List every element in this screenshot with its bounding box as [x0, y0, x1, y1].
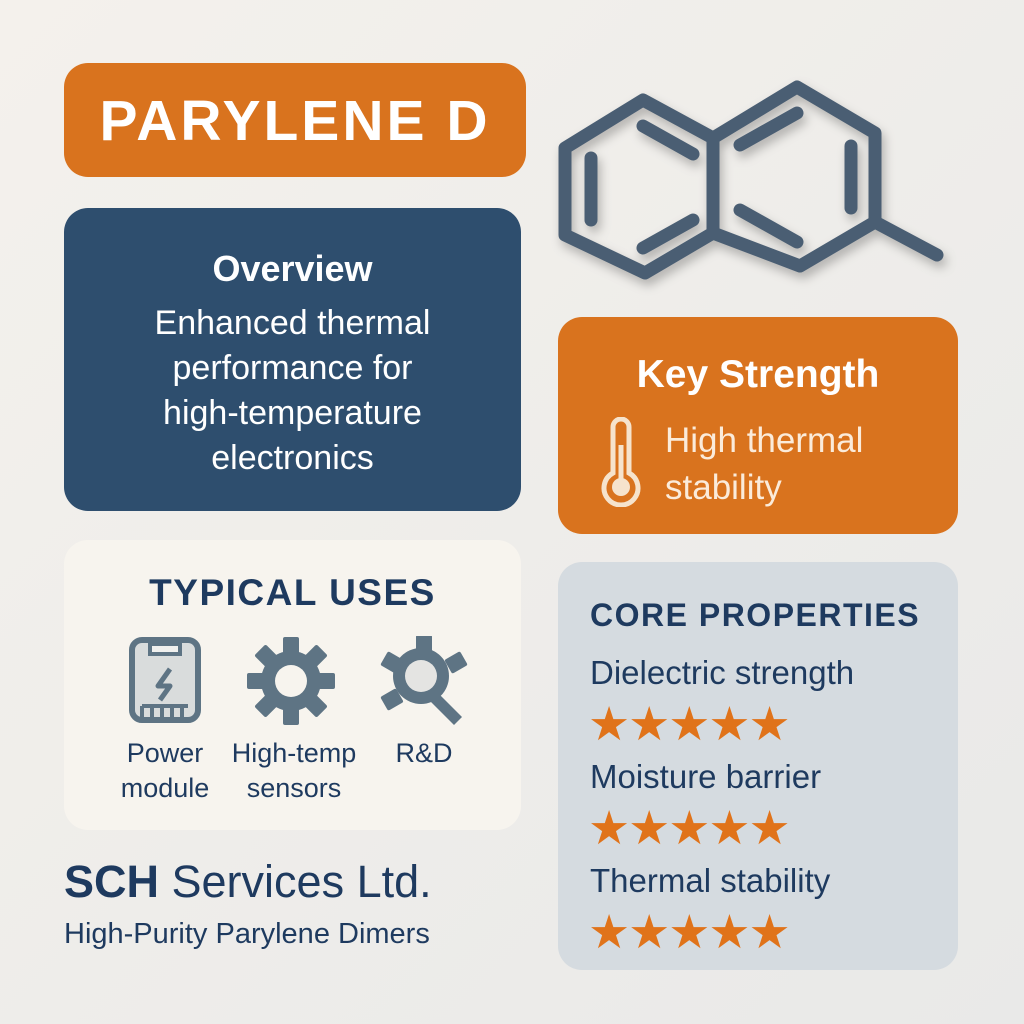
text: overview body [155, 304, 430, 477]
logo: SCH Services: SCH Services Ltd. [64, 856, 432, 907]
label: R&D: R&D [395, 738, 452, 768]
label: power module: Power [127, 738, 203, 768]
label: high-temp sensors: High-temp [232, 738, 356, 768]
icon: R&D [380, 636, 468, 725]
text: key strength [665, 421, 863, 507]
text: key strength: High thermal [665, 421, 863, 460]
property: moisture barrier [588, 758, 821, 854]
panel: key strength [558, 317, 958, 534]
label: high-temp sensors [232, 738, 356, 803]
icon: molecule [556, 80, 950, 290]
heading: core properties: CORE PROPERTIES [590, 597, 920, 633]
panel: typical uses [64, 540, 521, 830]
title [64, 63, 526, 177]
panel: overview [64, 208, 521, 511]
logo: SCH Services [64, 856, 432, 950]
property: dielectric strength: Dielectric strength [590, 654, 854, 691]
label: power module: module [121, 773, 209, 803]
property: thermal stability [588, 862, 830, 958]
icon: thermometer [601, 417, 641, 507]
panel: core properties [558, 562, 958, 970]
heading: overview: Overview [212, 248, 373, 289]
heading: key strength: Key Strength [637, 353, 879, 396]
property: thermal stability: Thermal stability [590, 862, 830, 899]
property: thermal stability: ★★★★★ [588, 905, 789, 958]
label: power module [121, 738, 209, 803]
text: overview body: high-temperature [163, 394, 422, 432]
text: overview body: electronics [211, 439, 374, 477]
icon: power module [129, 637, 201, 723]
property: moisture barrier: Moisture barrier [590, 758, 821, 795]
heading: typical uses: TYPICAL USES [149, 572, 436, 613]
label: high-temp sensors: sensors [247, 773, 341, 803]
title: PARYLENE D [99, 89, 491, 153]
icon: gear [247, 637, 335, 725]
text: overview body: performance for [172, 349, 412, 387]
property: moisture barrier: ★★★★★ [588, 801, 789, 854]
text: overview body: Enhanced thermal [155, 304, 430, 342]
property: dielectric strength: ★★★★★ [588, 697, 789, 750]
text: key strength: stability [665, 468, 782, 507]
property: dielectric strength [588, 654, 854, 750]
logo: SCH Services: High-Purity Parylene Dimers [64, 918, 430, 950]
